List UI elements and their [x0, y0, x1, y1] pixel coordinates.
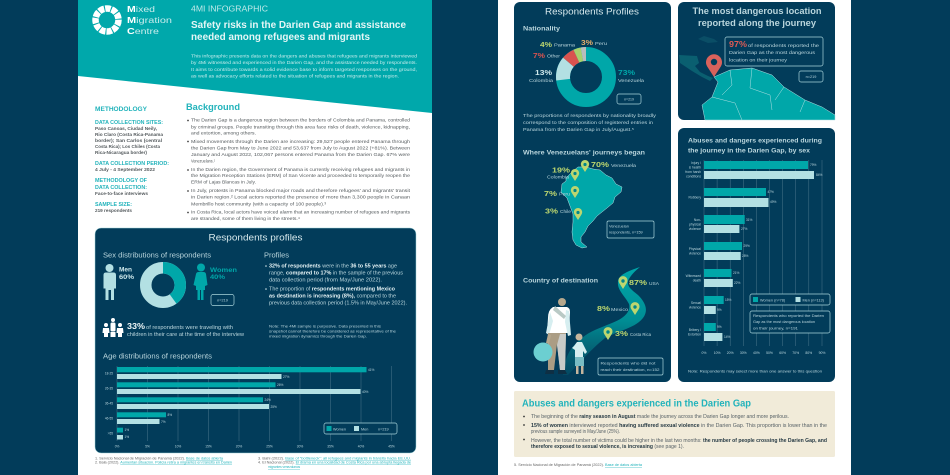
callout: 97 percent: location on their journey: [729, 58, 788, 64]
bar chart: abuses by sex: Bribery /: [689, 328, 701, 332]
bar chart: abuses by sex: Sexual: [691, 301, 701, 305]
nationality labels: 13%: [535, 68, 552, 77]
profiles text: range, compared to 17% in the sample of the previous: [269, 270, 404, 276]
bar chart: abuses by sex: Extortion: [688, 332, 701, 336]
icon: woman: [194, 264, 208, 300]
methodology sidebar: Rio Claro (Costa Rica-Panama: [95, 132, 163, 137]
nationality paragraph: [523, 113, 657, 133]
sampling note: mixed migration dynamics through the Darien Gap.: [269, 334, 367, 338]
men share: [119, 266, 134, 281]
bar chart: age distribution: 8%: [168, 413, 172, 417]
destination labels: 8%: [597, 304, 610, 313]
bar chart: age distribution: >55: [108, 432, 113, 436]
background heading: Background: [186, 102, 240, 112]
background bullets: January and August 2022, 102,067 persons entered Panama from the Darien Gap. 67% were: [191, 152, 410, 158]
nationality labels: [529, 38, 645, 83]
bar chart: abuses by sex: 84%: [816, 173, 823, 177]
methodology sidebar: border); San Carlos (central: [95, 138, 162, 143]
bar chart: abuses by sex: 31%: [746, 218, 753, 222]
destination labels: [597, 278, 659, 338]
bar chart: age distribution: 46-55: [105, 416, 113, 420]
bar chart: abuses by sex: & health: [689, 166, 701, 170]
background bullets: by criminal groups. People transiting through this area face risks of death, violence, kidnapping,: [191, 124, 410, 130]
bar chart: abuses by sex: conditions: [686, 174, 701, 178]
sample size box: n=219: [217, 298, 228, 302]
nationality labels: Panama: [554, 42, 576, 48]
age chart legend: [324, 423, 397, 434]
children statistic: 33%: [127, 322, 145, 331]
callout: 97 percent: of respondents reported the: [748, 43, 819, 49]
bar chart: abuses by sex: 9%: [717, 325, 722, 329]
abuses chart legend: Women (n=78): [760, 298, 786, 302]
bar chart: age distribution: [105, 366, 395, 448]
bar chart: abuses by sex: 40%: [753, 351, 760, 355]
icon: family group: [102, 318, 124, 337]
nationality labels: Other: [547, 54, 561, 58]
bar chart: abuses by sex: 50%: [766, 351, 773, 355]
summary bullets: However, the total number of victims could be higher in the last two months: the number of people crossing the Darien Gap, and: [531, 438, 827, 444]
Venezuelan sample box: Venezuelan: [609, 224, 629, 228]
bar chart: age distribution: 1%: [124, 435, 129, 439]
bar chart: age distribution: 15%: [205, 444, 212, 448]
background bullets: [187, 118, 411, 222]
sampling note: snapshot cannot therefore be considered as representative of the: [269, 330, 396, 334]
journey origin labels: 7%: [544, 189, 557, 198]
bar chart: age distribution: 7%: [161, 420, 166, 424]
panel heading: Respondents Profiles: [545, 6, 640, 16]
Venezuelan sample box: respondents, n=159: [609, 230, 643, 234]
background bullets: In July, protests in Panama blocked major roads and therefore refugees' and migrants' transit: [191, 188, 411, 194]
background bullets: and extortion, among others.: [191, 130, 256, 136]
callout: 97 percent: Darien Gap as the most dangerous: [729, 50, 816, 56]
methodology sidebar: METHODOLOGY: [95, 107, 147, 113]
bar chart: age distribution: 10%: [175, 444, 181, 448]
bar chart: age distribution: 5%: [145, 444, 150, 448]
destination labels: Costa Rica: [630, 332, 651, 337]
main title: [191, 20, 406, 43]
bar chart: abuses by sex: 79%: [810, 163, 817, 167]
bar chart: abuses by sex: violence: [689, 306, 701, 310]
sample size box: n=219: [624, 98, 634, 102]
background bullets: Membrillo host community (with a capacity of 100 people).³: [191, 202, 326, 208]
background bullets: Mixed movements through the Darien are increasing: 29,527 people entered Panama through: [191, 139, 410, 145]
intro paragraph: as well as advocacy efforts related to the situation of refugees and migrants in the region.: [191, 74, 399, 78]
bar chart: abuses by sex: 70%: [792, 351, 799, 355]
summary bullets: The beginning of the rainy season in August made the journey across the Darien Gap longer and more perilous.: [531, 414, 789, 420]
footnotes page 1: 4. El Nacional (2022). El drama en una localidad de Costa Rica por una abrupta llegada de: [258, 460, 411, 464]
logo: Mixed Migration Centre: Mixed: [127, 4, 155, 14]
women share: Women: [210, 267, 237, 274]
bar chart: abuses by sex: 49%: [770, 200, 777, 204]
background bullets: In Costa Rica, local actors have voiced alarm that an increasing number of refugees and migrants: [191, 210, 411, 216]
journey origin labels: 19%: [552, 166, 570, 174]
children statistic: of respondents were traveling with: [146, 325, 233, 331]
panel heading: the journey in the Darien Gap, by sex: [688, 148, 810, 154]
methodology sidebar: DATA COLLECTION PERIOD:: [95, 161, 169, 167]
pin: Mexico: [631, 302, 640, 315]
panel heading: reported along the journey: [698, 18, 816, 28]
destination labels: Mexico: [611, 307, 629, 312]
bar chart: age distribution: 25%: [266, 444, 273, 448]
men share: Men: [119, 266, 132, 274]
methodology sidebar: Face-to-face interviews: [95, 191, 148, 196]
summary heading: Abuses and dangers experienced in the Darien Gap: [522, 398, 751, 410]
background bullets: In the Darien region, the Government of Panama is currently receiving refugees and migrants in: [191, 167, 410, 173]
destination sample box: Respondents who did not: [600, 362, 657, 366]
methodology sidebar: DATA COLLECTION SITES:: [95, 120, 163, 126]
methodology sidebar: 219 respondents: [95, 208, 132, 213]
background bullets: in Darien region.² Local actors reported the presence of more than 3,300 people in Canaan: [191, 194, 410, 200]
main title: needed among refugees and migrants: [191, 32, 370, 43]
panel: abuses and dangers summary: [514, 391, 835, 457]
bar chart: age distribution: 41%: [368, 368, 375, 372]
sampling note: [269, 324, 396, 338]
profiles text: 32% of respondents were in the 36 to 55 years age: [269, 264, 397, 270]
destination sample box: reach their destination, n=152: [600, 368, 660, 372]
panel heading: Respondents profiles: [208, 232, 303, 244]
age chart legend: Women: [333, 427, 346, 431]
methodology sidebar: 4 July - 4 September 2022: [95, 167, 155, 172]
background bullets: Venezuelans.¹: [191, 158, 215, 164]
report label: 4MI INFOGRAPHIC: [191, 4, 268, 14]
intro paragraph: by 4Mi witnessed and experienced in the Darien Gap, and the assistance needed by respondents.: [191, 60, 417, 65]
bar chart: age distribution: 26%: [277, 383, 284, 387]
nationality labels: 3%: [581, 38, 593, 47]
destination sample box: [598, 358, 663, 375]
sex distribution heading: Sex distributions of respondents: [103, 252, 212, 260]
journey origin labels: Peru: [559, 192, 571, 196]
profiles text: previous data collection period (1.5% in May/June 2022).: [269, 300, 407, 306]
profiles text: data collection period (from May/June 2022).: [269, 278, 382, 284]
bar chart: abuses by sex: [685, 160, 825, 355]
profiles text: [264, 252, 407, 306]
respondents callout: Respondents who reported the Darien: [753, 313, 824, 318]
road illustration: [563, 267, 646, 375]
bar chart: abuses by sex: Physical: [689, 247, 701, 251]
logo: Mixed Migration Centre: Migration: [127, 15, 172, 25]
methodology sidebar: METHODOLOGY OF: [95, 178, 147, 184]
methodology sidebar: SAMPLE SIZE:: [95, 202, 132, 208]
bar chart: age distribution: 36-45: [105, 402, 113, 406]
panel: respondents profiles, nationality and journeys: [514, 2, 671, 382]
bar chart: age distribution: 40%: [358, 444, 364, 448]
destination heading: Country of destination: [523, 278, 598, 284]
panel heading: The most dangerous location: [692, 6, 822, 16]
icon: man: [104, 264, 116, 300]
nationality labels: 7%: [533, 51, 545, 60]
respondents callout: on their journey, n=191: [753, 326, 798, 330]
panel heading: [688, 138, 822, 154]
footnotes page 1: 1. Servicio Nacional de Migración de Panamá (2022). Base de datos abierta: [95, 456, 223, 460]
callout: 97 percent: [725, 37, 823, 66]
panel: abuses and dangers by sex: [678, 128, 835, 382]
panel heading: Abuses and dangers experienced during: [688, 138, 822, 144]
Venezuelan sample box: [607, 221, 654, 238]
donut: nationality: [563, 54, 609, 100]
nationality labels: 73%: [618, 68, 635, 77]
destination labels: 87%: [629, 278, 647, 287]
age distribution heading: Age distributions of respondents: [103, 354, 213, 360]
sample size box: n=219: [806, 75, 816, 79]
summary bullets: previous sample surveyed in May/June (25%).: [531, 429, 620, 435]
sample size box: [799, 71, 823, 82]
bar chart: abuses by sex: 22%: [734, 281, 741, 285]
background bullets: ERM of Lajas Blancas in July.: [191, 180, 256, 186]
illustration: child: [572, 334, 587, 374]
bar chart: abuses by sex: 9%: [717, 308, 722, 312]
journey origin labels: 70%: [591, 160, 609, 169]
profiles text: Profiles: [264, 252, 290, 260]
age chart legend: Men: [361, 427, 368, 431]
background bullets: the Darien Gap from May to June 2022 and 53,637 from July to August 2022 (+81%). Between: [191, 146, 410, 152]
intro paragraph: This infographic presents data on the dangers and abuses that refugees and migrants interviewed: [191, 54, 417, 58]
bar chart: abuses by sex: 20%: [727, 351, 734, 355]
bar chart: age distribution: 45%: [388, 444, 395, 448]
bar chart: abuses by sex: death: [693, 278, 701, 282]
page 1: [78, 0, 432, 475]
bar chart: age distribution: 40%: [362, 390, 369, 394]
pin: Peru: [571, 186, 579, 198]
bar chart: age distribution: 27%: [283, 375, 290, 379]
journey origin labels: Chile: [560, 209, 572, 214]
bar chart: age distribution: 25%: [270, 405, 277, 409]
bar chart: abuses by sex: Robbery: [689, 196, 701, 200]
bar chart: abuses by sex: violence: [689, 227, 701, 231]
journey origin labels: 3%: [545, 206, 558, 216]
bar chart: abuses by sex: 29%: [744, 244, 750, 248]
abuses chart legend: [750, 294, 830, 305]
callout: 97 percent: 97%: [729, 40, 747, 49]
bar chart: age distribution: 20%: [236, 444, 242, 448]
children statistic: [127, 322, 244, 338]
sample size box: [211, 294, 234, 306]
bar chart: abuses by sex: 0%: [702, 351, 706, 355]
panel: respondents profiles: [95, 228, 416, 453]
bar chart: abuses by sex: Witnessed: [686, 274, 701, 278]
chart note: Note: Respondents may select more than one answer to this question: [688, 368, 822, 374]
bar chart: age distribution: 26-35: [105, 386, 113, 390]
bar chart: age distribution: 30%: [297, 444, 303, 448]
journey origin labels: Colombia: [547, 174, 570, 180]
nationality paragraph: Panama from the Darien Gap in July/August.⁵: [523, 127, 634, 133]
bar chart: abuses by sex: 28%: [742, 254, 749, 258]
bar chart: abuses by sex: 15%: [725, 298, 732, 302]
respondents callout: Gap as the most dangerous location: [753, 319, 815, 324]
bar chart: age distribution: 24%: [264, 398, 271, 402]
nationality labels: Peru: [595, 41, 608, 46]
panel heading: [692, 6, 822, 28]
bar chart: abuses by sex: 47%: [768, 190, 774, 194]
bar chart: abuses by sex: Injury /: [691, 161, 701, 165]
bar chart: age distribution: 35%: [327, 444, 334, 448]
logo: Mixed Migration Centre: Centre: [127, 26, 159, 36]
pin: Chile: [574, 208, 582, 220]
summary bullets: 15% of women interviewed reported having suffered sexual violence in the Darien Gap. This proportion is lower than in the: [531, 423, 827, 429]
bar chart: abuses by sex: physical: [689, 222, 701, 226]
footnotes page 1: migrantes venezolanos: [268, 465, 300, 469]
donut: sex distribution: [146, 268, 180, 302]
pin: Costa Rica: [604, 327, 613, 340]
background bullets: the Migration Reception Stations (ERM) of San Vicente and proceeded to temporarily reopen the: [191, 173, 410, 179]
bar chart: abuses by sex: 14%: [724, 335, 731, 339]
nationality heading: Nationality: [523, 26, 560, 32]
bar chart: abuses by sex: 90%: [819, 351, 825, 355]
nationality labels: Colombia: [529, 78, 554, 83]
methodology sidebar: Rica-Nicaragua border): [95, 150, 147, 155]
footnotes page 1: 2. Bala (2022). Aumentan situación. Policía retira a migrantes en tránsito en Darién: [95, 460, 232, 464]
men share: 60%: [119, 274, 134, 281]
icon: red location pin: [706, 54, 722, 77]
sample size box: [617, 94, 641, 104]
background bullets: The Darien Gap is a dangerous region between the borders of Colombia and Panama, controlled: [191, 118, 410, 124]
bar chart: abuses by sex: 80%: [805, 351, 812, 355]
header band: [78, 0, 432, 113]
bar chart: age distribution: 0%: [115, 444, 119, 448]
footnotes page 1: 3. Bahl (2022). Base of "bottleneck": all refugees and migrants in tránsito hacia EE.UU.: [258, 456, 411, 460]
footnote page 2: 5. Servicio Nacional de Migración de Panamá (2022). Base de datos abierta: [514, 463, 642, 467]
bar chart: abuses by sex: Non-: [694, 218, 701, 222]
methodology sidebar: [95, 107, 169, 213]
journeys heading: Where Venezuelans' journeys began: [523, 150, 645, 156]
sampling note: Note: The 4Mi sample is purposive. Data presented in this: [269, 324, 381, 328]
children statistic: children in their care at the time of the interview: [127, 332, 244, 338]
journey origin labels: [544, 160, 637, 216]
page 2: [498, 0, 851, 475]
summary bullets: therefore exposed to sexual violence, is increasing (see page 1).: [531, 444, 684, 450]
background bullets: are stranded, some of them living in the streets.⁴: [191, 216, 300, 222]
pin: Colombia: [571, 169, 579, 181]
destination labels: 3%: [615, 329, 628, 338]
profiles text: as destination is increasing (8%), compared to the: [269, 294, 396, 300]
methodology sidebar: DATA COLLECTION:: [95, 185, 147, 191]
methodology sidebar: Costa Rica); Los Chiles (Costa: [95, 144, 160, 149]
women share: [210, 267, 237, 281]
bar chart: age distribution: 18-25: [105, 372, 113, 376]
nationality labels: Venezuela: [618, 78, 645, 83]
nationality paragraph: The proportions of respondents by nationality broadly: [523, 113, 657, 119]
map: Central and South America: [679, 36, 835, 120]
summary bullets: [523, 414, 827, 450]
bar chart: abuses by sex: violence: [689, 252, 701, 256]
bar chart: abuses by sex: 60%: [779, 351, 786, 355]
profiles text: The proportion of respondents mentioning Mexico: [269, 286, 395, 292]
bar chart: abuses by sex: from harsh: [685, 170, 701, 174]
footnotes page 1: [95, 456, 411, 469]
logo: Mixed Migration Centre: [96, 4, 172, 36]
pin: Venezuela: [581, 160, 589, 172]
intro paragraph: It aims to contribute towards a solid evidence base to inform targeted responses on the ground,: [191, 67, 417, 72]
age chart legend: n=219: [378, 427, 389, 431]
bar chart: age distribution: 1%: [124, 428, 129, 432]
destination labels: USA: [649, 281, 659, 286]
pin: USA: [619, 276, 628, 289]
bar chart: abuses by sex: 27%: [741, 227, 748, 231]
illustration: adult migrant with bag: [534, 298, 571, 374]
journey origin labels: Venezuela: [611, 163, 637, 168]
respondents callout: [750, 311, 830, 333]
bar chart: abuses by sex: 21%: [733, 271, 740, 275]
women share: 40%: [210, 274, 225, 281]
main title: Safety risks in the Darien Gap and assistance: [191, 20, 406, 31]
methodology sidebar: Paso Canoas, Ciudad Neily,: [95, 126, 157, 131]
nationality paragraph: correspond to the composition of registered entries in: [523, 120, 653, 126]
intro paragraph: [191, 54, 417, 78]
bar chart: abuses by sex: 10%: [714, 351, 720, 355]
abuses chart legend: Men (n=113): [802, 298, 825, 302]
bar chart: abuses by sex: 30%: [740, 351, 747, 355]
nationality labels: 4%: [540, 40, 552, 49]
map: South America: [561, 167, 622, 248]
panel: most dangerous location: [678, 2, 835, 120]
